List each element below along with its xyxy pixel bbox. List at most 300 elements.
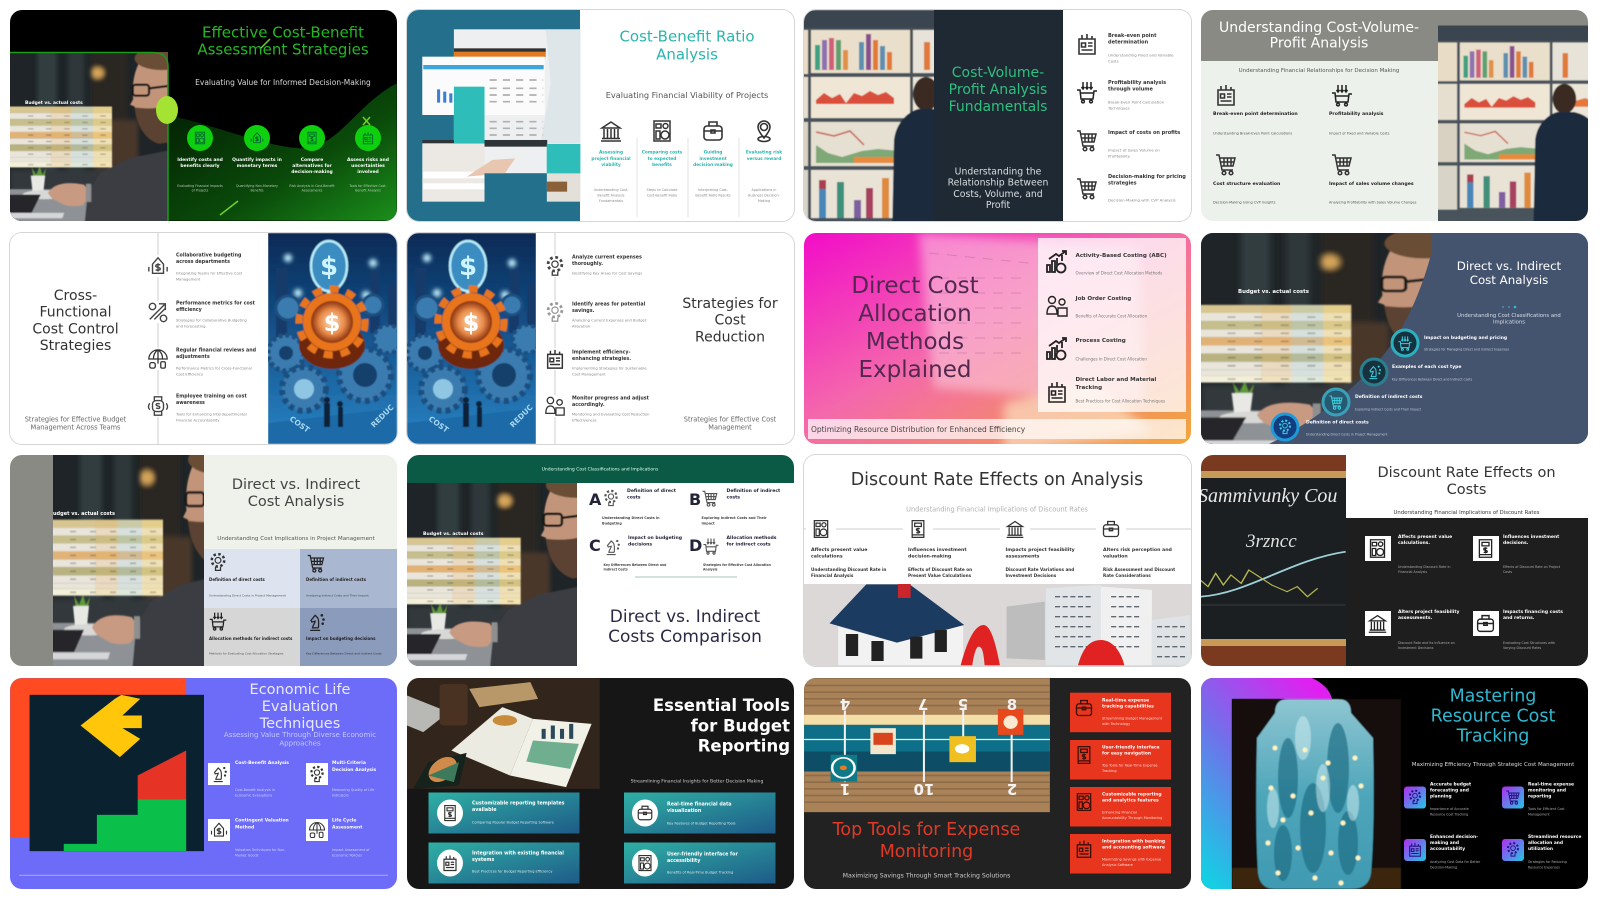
item: employee training: Financial Accountability (176, 418, 220, 422)
photo: man with budget table: Budget vs. actual costs (25, 100, 83, 106)
item: cost-benefit: Cost-Benefit Analysis in (235, 788, 275, 792)
photo: man with budget table (1, 38, 370, 238)
card: real-time tracking: tracking capabilities (1102, 703, 1154, 709)
card: reporting templates: Comparing Popular Budget Reporting Software (472, 820, 554, 824)
item: compare alternatives: alternatives for (292, 163, 332, 169)
title: Direct Cost (851, 272, 979, 298)
title: Explained (859, 356, 971, 382)
title: Analysis (656, 46, 718, 64)
panel: Mastering Resource Cost Tracking (1201, 678, 1588, 889)
item: job order costing: Benefits of Accurate Cost Allocation (1076, 313, 1148, 318)
item: project feasibility: Impacts project feasibility (1006, 547, 1075, 553)
item: impact on budgeting: Impact on budgeting and pricing (1424, 334, 1507, 340)
photo: man with budget table: Budget vs. actual costs (1238, 288, 1309, 294)
item: process costing (1047, 338, 1147, 361)
quadrant: budgeting decisions (300, 608, 397, 666)
card: real-time visualization: Real-time financial data (667, 801, 732, 807)
subtitle: Maximizing Savings Through Smart Tracking Solutions (843, 872, 1010, 879)
item: compare alternatives: decision-making (291, 169, 333, 175)
item B: Impact (702, 522, 715, 526)
item: cost structure (1213, 155, 1280, 204)
item: accurate budget: planning (1430, 793, 1452, 799)
item: present value: calculations. (1398, 540, 1430, 546)
item: streamlined resource: Strategies for Reducing (1528, 860, 1567, 864)
panel: Top Tools for Expense Monitoring (804, 678, 1191, 889)
item: cost structure: Decision-Making Using CVP Insights (1213, 200, 1276, 204)
item B: B (689, 490, 701, 509)
item: accurate budget: Importance of Accurate (1430, 806, 1469, 810)
item: evaluating risk: Evaluating risk (746, 150, 782, 156)
photo: chalkboard: 3rzncc (1245, 531, 1297, 552)
item: present value: Affects present value (1398, 534, 1452, 540)
item A (589, 488, 677, 526)
item: life cycle: Economic Policies (332, 853, 362, 857)
item C: Impact on budgeting (628, 535, 682, 541)
item: feasibility: assessments. (1398, 615, 1433, 621)
graphic: timeline on wood: 2 (1007, 780, 1017, 798)
item: process costing: Challenges in Direct Cost Allocation (1076, 356, 1147, 361)
item: real-time monitoring: reporting (1528, 793, 1551, 799)
item: risk perception (1096, 517, 1175, 578)
subtitle (1457, 305, 1561, 325)
title: Effective Cost-Benefit (202, 23, 364, 41)
item: present value: Affects present value (811, 547, 867, 553)
item: investment decision: Effects of Discount Rate on (908, 567, 972, 572)
card: reporting templates: available (472, 807, 497, 813)
item: investment decision: Present Value Calculations (908, 573, 972, 578)
title: Direct vs. Indirect (610, 607, 761, 627)
divider (19, 874, 388, 876)
subtitle: Evaluating Value for Informed Decision-Making (195, 78, 371, 87)
item C: Key Differences Between Direct and (604, 563, 666, 567)
item: assessing project financial viability: Assessing (599, 150, 623, 156)
item: project feasibility: assessments (1006, 554, 1040, 560)
item: monitor progress (543, 394, 650, 422)
item: feasibility: Alters project feasibility (1398, 609, 1459, 615)
item: present value: Understanding Discount Rate in (811, 567, 886, 572)
item: present value: Financial Analysis (811, 573, 854, 578)
item: financial reviews: adjustments (176, 354, 210, 360)
graphic: timeline on wood: 7 (918, 694, 928, 712)
item: examples of cost type (1361, 358, 1473, 384)
panel: Cross-Functional Cost Control Strategies (10, 232, 397, 444)
item: feasibility: Investment Decisions (1398, 646, 1434, 650)
photo: man with budget table: udget vs. actual costs (53, 511, 115, 517)
item: activity-based costing (1047, 250, 1167, 275)
item: financing costs: Evaluating Cost Structures with (1503, 641, 1555, 645)
item: project feasibility: Investment Decisions (1006, 573, 1057, 578)
item: cost-benefit (208, 760, 289, 797)
item: financing costs: and returns. (1503, 615, 1535, 621)
card: user-friendly interface: Benefits of Real-Time Budget Tracking (667, 870, 733, 874)
item: identify costs: of Projects (192, 189, 209, 193)
item: quantify impacts: Benefits (250, 189, 264, 193)
item: financial reviews: Performance Metrics for Cross-Functional (176, 366, 252, 370)
item: employee training: Tools for Enhancing Interdepartmental (175, 412, 247, 416)
item: multi-criteria: Decision Analysis (332, 766, 376, 772)
quadrant: allocation methods: Allocation methods for indirect costs (209, 636, 293, 641)
item: contingent valuation: Valuation Techniques for Non- (235, 848, 286, 852)
item: break-even: Break-even point determination (1213, 111, 1298, 117)
item: efficiency strategies: Implement efficiency- (572, 349, 630, 355)
item: profitability: Profitability analysis (1329, 111, 1384, 117)
photo: gears and dollar: $ (320, 252, 338, 282)
item: analyze expenses: Identifying Key Areas for Cost Savings (572, 271, 642, 275)
title: for Budget (691, 716, 790, 735)
graphic: arrow, stairs and colour blocks (10, 678, 204, 851)
card: user-friendly: for easy navigation (1102, 750, 1151, 756)
graphic: timeline on wood: 5 (958, 694, 968, 712)
item B (689, 488, 781, 526)
item: present value: Understanding Discount Rate in (1398, 565, 1450, 569)
item: profitability (1329, 85, 1390, 136)
item: impact on budgeting: Strategies for Managing Direct and Indirect Expenses (1424, 347, 1510, 351)
item: contingent valuation: Method (235, 824, 254, 830)
item: monitor progress: Monitoring and Evaluating Cost Reduction (572, 412, 650, 416)
item: decision-making for pricing: strategies (1108, 181, 1137, 187)
panel: Economic Life Evaluation Techniques (10, 678, 397, 889)
item: evaluating risk (746, 121, 782, 203)
card: integration: Analysis Software (1102, 863, 1133, 867)
card: user-friendly interface: User-friendly interface for (667, 851, 738, 857)
card: real-time tracking: Real-time expense (1102, 697, 1149, 703)
item: multi-criteria (306, 760, 376, 797)
photo: house, red arches and buildings (804, 584, 1191, 666)
subtitle: Evaluating Financial Viability of Projects (606, 90, 768, 100)
item: real-time monitoring (1502, 781, 1574, 816)
item: compare alternatives (289, 125, 335, 193)
item: multi-criteria: Multi-Criteria (332, 760, 366, 766)
card: customizable reporting (1070, 786, 1171, 826)
item: assessing project financial viability: Understanding Cost- (594, 188, 629, 192)
title: Resource Cost (1431, 706, 1555, 726)
item: impact of costs: Profitability (1108, 154, 1131, 158)
photo: gears and dollar: COST (288, 414, 312, 434)
panel: Direct Cost Allocation Methods Explained (804, 233, 1191, 444)
item: assess risks: Assess risks and (347, 157, 389, 163)
grey header band (1201, 10, 1588, 61)
item: efficiency strategies (543, 348, 647, 376)
item: profitability analysis: through volume (1108, 87, 1153, 93)
card: user-friendly interface: accessibility (667, 858, 701, 864)
item: profitability: Impact of Fixed and Variable Costs (1329, 132, 1390, 136)
card: integration: Maximizing Savings with Expense (1102, 857, 1161, 861)
item: streamlined resource: utilization (1528, 846, 1553, 852)
item: quantify impacts: Quantifying Non-Monetary (236, 184, 278, 188)
item: compare alternatives: Compare (301, 157, 323, 163)
title: Monitoring (880, 842, 973, 862)
item: project feasibility: Discount Rate Variations and (1006, 567, 1074, 572)
item: profitability analysis: Profitability analysis (1108, 80, 1166, 86)
item: decision-making for pricing (1077, 174, 1186, 202)
item: investment decision: decision-making (908, 554, 951, 560)
item: guiding investment (693, 122, 733, 198)
panel: Discount Rate Effects on Analysis (804, 455, 1191, 666)
item: streamlined resource: Resource Expenses (1528, 865, 1560, 869)
graphic: timeline on wood: 1 (840, 780, 850, 798)
card: system integration: Best Practices for Budget Reporting Efficiency (472, 869, 552, 873)
item: guiding investment: investment (699, 156, 727, 162)
item A: costs (627, 494, 641, 500)
item: feasibility (1365, 609, 1459, 650)
item: break-even: Understanding Break-Even Point Calculations (1213, 132, 1292, 136)
item: performance metrics (146, 300, 256, 328)
item: performance metrics: efficiency (176, 307, 203, 313)
item: assessing project financial viability (591, 122, 631, 203)
panel: Cost-Benefit Ratio Analysis (407, 10, 794, 221)
card: integration (1070, 834, 1171, 873)
card: user-friendly interface (624, 842, 776, 883)
item: assess risks: Tools for Effective Cost- (348, 184, 387, 188)
item D: Allocation methods (726, 535, 777, 541)
item: assessing project financial viability: Fundamentals (599, 199, 623, 203)
panel: Direct vs. Indirect Cost Analysis (light) (10, 455, 397, 666)
item D: for indirect costs (726, 542, 771, 548)
item: present value (806, 517, 886, 578)
quadrant: budgeting decisions: Impact on budgeting decisions (306, 636, 376, 641)
panel: Strategies for Cost Reduction (407, 232, 794, 444)
title: Essential Tools (653, 696, 790, 714)
photo: chalkboard (1198, 455, 1346, 666)
title: Profit Analysis (949, 82, 1047, 98)
item: job order costing: Job Order Costing (1074, 296, 1131, 302)
title: Top Tools for Expense (832, 820, 1020, 840)
item: analyze expenses (543, 254, 642, 276)
card: integration: Integration with banking (1102, 838, 1165, 844)
title: Assessment Strategies (197, 40, 369, 58)
item: compare alternatives: Risk Analysis in Cost-Benefit (289, 184, 335, 188)
item: efficiency strategies: Implementing Strategies for Sustainable (572, 366, 647, 370)
item B: costs (726, 494, 740, 500)
card: real-time tracking (1070, 692, 1171, 732)
item: comparing costs: Cost-Benefit Ratio (647, 194, 677, 198)
item: examples of cost type: Examples of each cost type (1392, 364, 1461, 370)
graphic: timeline on wood: 4 (840, 694, 850, 712)
item: impact of costs: Impact of costs on profits (1108, 130, 1180, 136)
item: life cycle: Impact Assessment of (332, 848, 370, 852)
item: performance metrics: Strategies for Collaborative Budgeting (176, 318, 247, 322)
item: quantify impacts: monetary terms (237, 163, 278, 169)
subtitle: Understanding Cost Classifications and (1457, 312, 1561, 318)
item: contingent valuation: Contingent Valuation (235, 817, 289, 823)
item: performance metrics: Performance metrics for cost (176, 300, 256, 306)
item D: D (689, 536, 702, 555)
item: quantify impacts: Quantify impacts in (232, 157, 282, 163)
item: guiding investment: decision-making (693, 162, 733, 168)
item: profitability analysis: Break-Even Point Calculation (1108, 100, 1165, 104)
green header bar (407, 455, 794, 483)
item: life cycle (306, 817, 370, 857)
item B: Definition of indirect (726, 488, 781, 494)
title: Economic Life (250, 682, 351, 698)
item: identify costs: Identify costs and (177, 157, 223, 163)
card: reporting templates (428, 792, 580, 833)
item: direct labor: Best Practices for Cost Allocation Techniques (1076, 398, 1165, 403)
quadrant: allocation methods: Methods for Evaluating Cost Allocation Strategies (209, 652, 284, 656)
title: Cost Analysis (1470, 272, 1548, 286)
card: real-time tracking: with Technology (1102, 722, 1130, 726)
item: break-even point: determination (1108, 40, 1149, 46)
quadrant: indirect costs: Definition of indirect costs (306, 577, 367, 582)
gradient L-shape (1201, 678, 1332, 888)
photo: analyst facing chart wall (1438, 25, 1588, 221)
title: Reporting (698, 736, 790, 755)
quadrant: direct costs (204, 549, 300, 608)
title: Techniques (259, 716, 340, 732)
card: system integration: Integration with existing financial (472, 850, 564, 856)
item: break-even point (1079, 33, 1174, 64)
item: profitability analysis (1077, 80, 1166, 110)
item: identify costs (177, 125, 223, 193)
item: definition of indirect: Exploring Indirect Costs and Their Impact (1355, 407, 1422, 411)
title: Direct vs. Indirect (232, 477, 360, 493)
photo: analyst facing chart wall (804, 10, 934, 221)
item: risk perception: valuation (1103, 554, 1128, 560)
item: investment decisions: Effects of Discount Rate on Project (1503, 565, 1561, 569)
item: contingent valuation: Market Goods (235, 853, 259, 857)
item: accurate budget: forecasting and (1430, 787, 1469, 793)
item A: A (589, 490, 602, 509)
subtitle: Assessing Value Through Diverse Economic (224, 730, 376, 738)
item: break-even point: Understanding Fixed and Variable (1108, 52, 1174, 58)
photo: glass jar with lights (1232, 698, 1401, 888)
translucent list panel (1038, 238, 1186, 412)
title: Discount Rate Effects on Analysis (851, 470, 1143, 490)
item: comparing costs: Steps to Calculate (647, 188, 677, 192)
title: Cross- (54, 288, 97, 304)
photo: gears and dollar (407, 232, 541, 444)
item: comparing costs: to expected (648, 156, 676, 162)
title: Reduction (695, 329, 765, 345)
item: analyze expenses: Analyze current expenses (572, 254, 642, 260)
card: customizable reporting: and analytics features (1102, 797, 1159, 803)
item: collaborative budgeting: Collaborative budgeting (176, 252, 242, 258)
title: Direct vs. Indirect (1457, 258, 1562, 272)
card: user-friendly: Tracking (1101, 769, 1117, 773)
photo: gears and dollar: COST (427, 414, 451, 434)
item: present value (1365, 534, 1452, 574)
dividers (637, 138, 739, 217)
grey side band (10, 455, 53, 666)
item: real-time monitoring: Management (1528, 812, 1550, 816)
title: Costs (1447, 482, 1486, 498)
item: enhanced decision-making: Analyzing Cost Data for Better (1430, 860, 1481, 864)
item: assess risks: Benefit Analysis (355, 189, 381, 193)
card: user-friendly: Top Tools for Real-Time Expense (1101, 763, 1158, 767)
item: financial reviews: Cost Efficiency (176, 372, 204, 376)
panel: Direct vs. Indirect Cost Analysis (blue) (1201, 233, 1588, 444)
item: enhanced decision-making: accountability (1430, 846, 1465, 852)
panel: Discount Rate Effects on Costs (1201, 455, 1588, 666)
item C: Indirect Costs (604, 568, 628, 572)
item: impact of sales volume: Impact of sales volume changes (1329, 181, 1414, 187)
item: enhanced decision-making: Enhanced decision- (1430, 834, 1478, 840)
item: accurate budget: Resource Cost Tracking (1430, 812, 1468, 816)
item: financing costs: Impacts financing costs (1503, 609, 1563, 615)
item: activity-based costing: Overview of Direct Cost Allocation Methods (1076, 270, 1162, 275)
quadrant: indirect costs: Analyzing Indirect Costs and Their Impact (306, 594, 369, 598)
subtitle: Costs, Volume, and (953, 189, 1043, 200)
item: multi-criteria: Indicators (332, 793, 349, 797)
item: definition of indirect: Definition of indirect costs (1355, 394, 1423, 400)
item: break-even (1213, 85, 1298, 136)
item: definition of direct: Understanding Direct Costs in Project Management (1306, 432, 1388, 436)
item: assessing project financial viability: viability (601, 162, 621, 168)
item: process costing: Process Costing (1076, 338, 1126, 344)
card: real-time visualization (624, 792, 776, 833)
item: investment decisions (1473, 534, 1561, 574)
title: Cost-Benefit Ratio (619, 28, 755, 46)
photo: gears and dollar: REDUC (369, 402, 396, 429)
item: definition of direct: Definition of direct costs (1306, 419, 1369, 425)
item: evaluating risk: Making (758, 199, 770, 203)
item: monitor progress: accordingly. (572, 402, 605, 408)
card: real-time visualization: Key Features of Budget Reporting Tools (667, 821, 736, 825)
card: customizable reporting: Enhancing Financial (1102, 810, 1137, 814)
item: cost-benefit: Economic Evaluations (235, 793, 272, 797)
title: Understanding Cost-Volume- (1219, 20, 1419, 36)
item: investment decision: Influences investment (908, 547, 967, 553)
item: impact of sales volume: Analyzing Profitability with Sales Volume Changes (1329, 200, 1417, 204)
item: identify areas (543, 300, 647, 328)
item: impact of costs (1077, 130, 1180, 158)
item: comparing costs: benefits (652, 162, 672, 168)
item: evaluating risk: Applications in (752, 188, 776, 192)
item: employee training (146, 393, 247, 422)
item D: Analysis (703, 568, 718, 572)
item: enhanced decision-making (1404, 834, 1481, 869)
item: risk perception: Rate Considerations (1103, 573, 1151, 578)
item: assessing project financial viability: Benefit Analysis (597, 194, 625, 198)
subtitle: Maximizing Efficiency Through Strategic Cost Management (1412, 762, 1575, 768)
item: risk perception: Alters risk perception and (1103, 547, 1172, 553)
subtitle: Approaches (279, 739, 321, 747)
item: quantify impacts (232, 125, 282, 193)
title: Strategies for (682, 296, 778, 312)
item: employee training: awareness (176, 400, 205, 406)
item: enhanced decision-making: making and (1430, 840, 1459, 846)
subtitle: Implications (1493, 319, 1525, 325)
divider (157, 232, 159, 444)
subtitle: Profit (986, 200, 1010, 211)
item: assess risks: uncertainties (351, 163, 385, 169)
title: Cost (714, 312, 746, 328)
item: efficiency strategies: enhancing strategies. (572, 356, 631, 362)
item: decision-making for pricing: Decision-Making with CVP Analysis (1108, 198, 1176, 202)
title: Cost-Volume- (952, 65, 1044, 81)
title: Allocation (858, 300, 972, 326)
item: financial reviews (146, 347, 257, 376)
title: Profit Analysis (1270, 36, 1368, 52)
item: identify areas: Identify areas for potential (572, 301, 646, 307)
item: financing costs (1473, 609, 1563, 650)
title: Fundamentals (949, 99, 1047, 115)
quadrant: budgeting decisions: Key Differences Between Direct and Indirect Costs (306, 652, 382, 656)
item: collaborative budgeting: across departments (176, 259, 230, 265)
item: investment decisions: decisions. (1503, 540, 1529, 546)
title: Methods (866, 328, 964, 354)
card: real-time tracking: Streamlining Budget Management (1102, 716, 1163, 720)
item B: Exploring Indirect Costs and Their (702, 516, 767, 520)
item: accurate budget: Accurate budget (1430, 781, 1471, 787)
item: impact of sales volume (1329, 155, 1417, 204)
item: feasibility: Discount Rate and Its Influence on (1398, 641, 1455, 645)
item: impact of costs: Impact of Sales Volume on (1108, 148, 1160, 152)
card: system integration (428, 842, 580, 883)
item: financial reviews: Regular financial reviews and (176, 347, 257, 353)
photo: notebook on wooden desk (407, 678, 600, 788)
title: Evaluation (262, 698, 338, 714)
